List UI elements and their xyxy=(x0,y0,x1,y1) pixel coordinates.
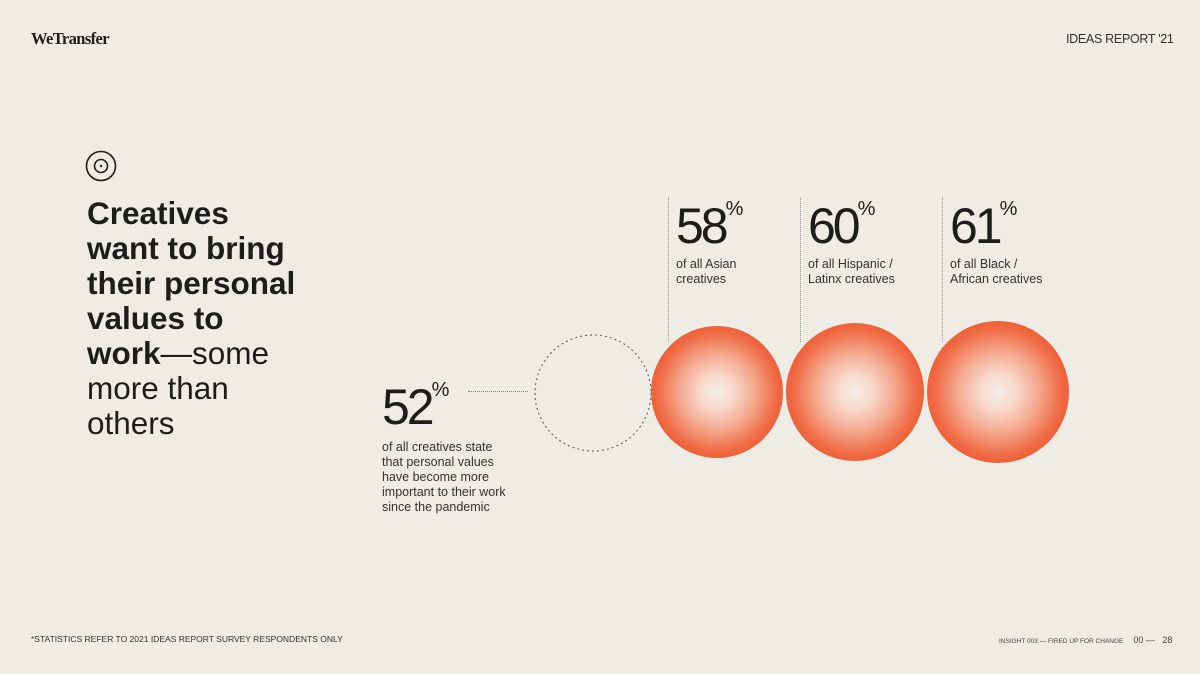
stat: 61% xyxy=(950,198,1042,286)
stat: 52%: important to their work xyxy=(382,485,506,499)
stat: 52% xyxy=(382,379,506,514)
title: Creatives xyxy=(87,195,229,231)
title: values to xyxy=(87,300,224,336)
ball 60 xyxy=(786,323,924,461)
vertical dotted lines xyxy=(668,197,669,342)
title: their personal xyxy=(87,265,295,301)
stat: 52%: of all creatives state xyxy=(382,440,492,454)
stat: 61%: African creatives xyxy=(950,272,1042,286)
icon: target xyxy=(86,150,116,182)
logo: WeTransfer xyxy=(31,29,109,48)
report label: IDEAS REPORT '21 xyxy=(1066,32,1174,46)
stat: 58%: creatives xyxy=(676,272,726,286)
ball 61 xyxy=(927,321,1069,463)
stat: 58%: of all Asian xyxy=(676,257,736,271)
title: others xyxy=(87,405,175,441)
ball 58 xyxy=(651,326,783,458)
stat: 61%: 61% xyxy=(950,198,1017,254)
stat: 60%: Latinx creatives xyxy=(808,272,895,286)
connector dotted line xyxy=(468,391,528,392)
title: more than xyxy=(87,370,229,406)
stat: 60%: 60% xyxy=(808,198,875,254)
title: want to bring xyxy=(87,230,285,266)
footnote: *STATISTICS REFER TO 2021 IDEAS REPORT SURVEY RESPONDENTS ONLY xyxy=(31,634,343,644)
stat: 60%: of all Hispanic / xyxy=(808,257,893,271)
stat: 52%: that personal values xyxy=(382,455,494,469)
stat: 52%: 52% xyxy=(382,379,449,435)
footer page info: INSIGHT 003 — FIRED UP FOR CHANGE 00 — 28 xyxy=(999,635,1172,645)
stat: 52%: since the pandemic xyxy=(382,500,490,514)
stat: 58% xyxy=(676,198,743,286)
stat: 58%: 58% xyxy=(676,198,743,254)
stat: 52%: have become more xyxy=(382,470,489,484)
title: work—some xyxy=(87,335,269,371)
title xyxy=(86,195,295,441)
stat: 60% xyxy=(808,198,895,286)
stat: 61%: of all Black / xyxy=(950,257,1017,271)
dashed circle xyxy=(534,334,652,452)
